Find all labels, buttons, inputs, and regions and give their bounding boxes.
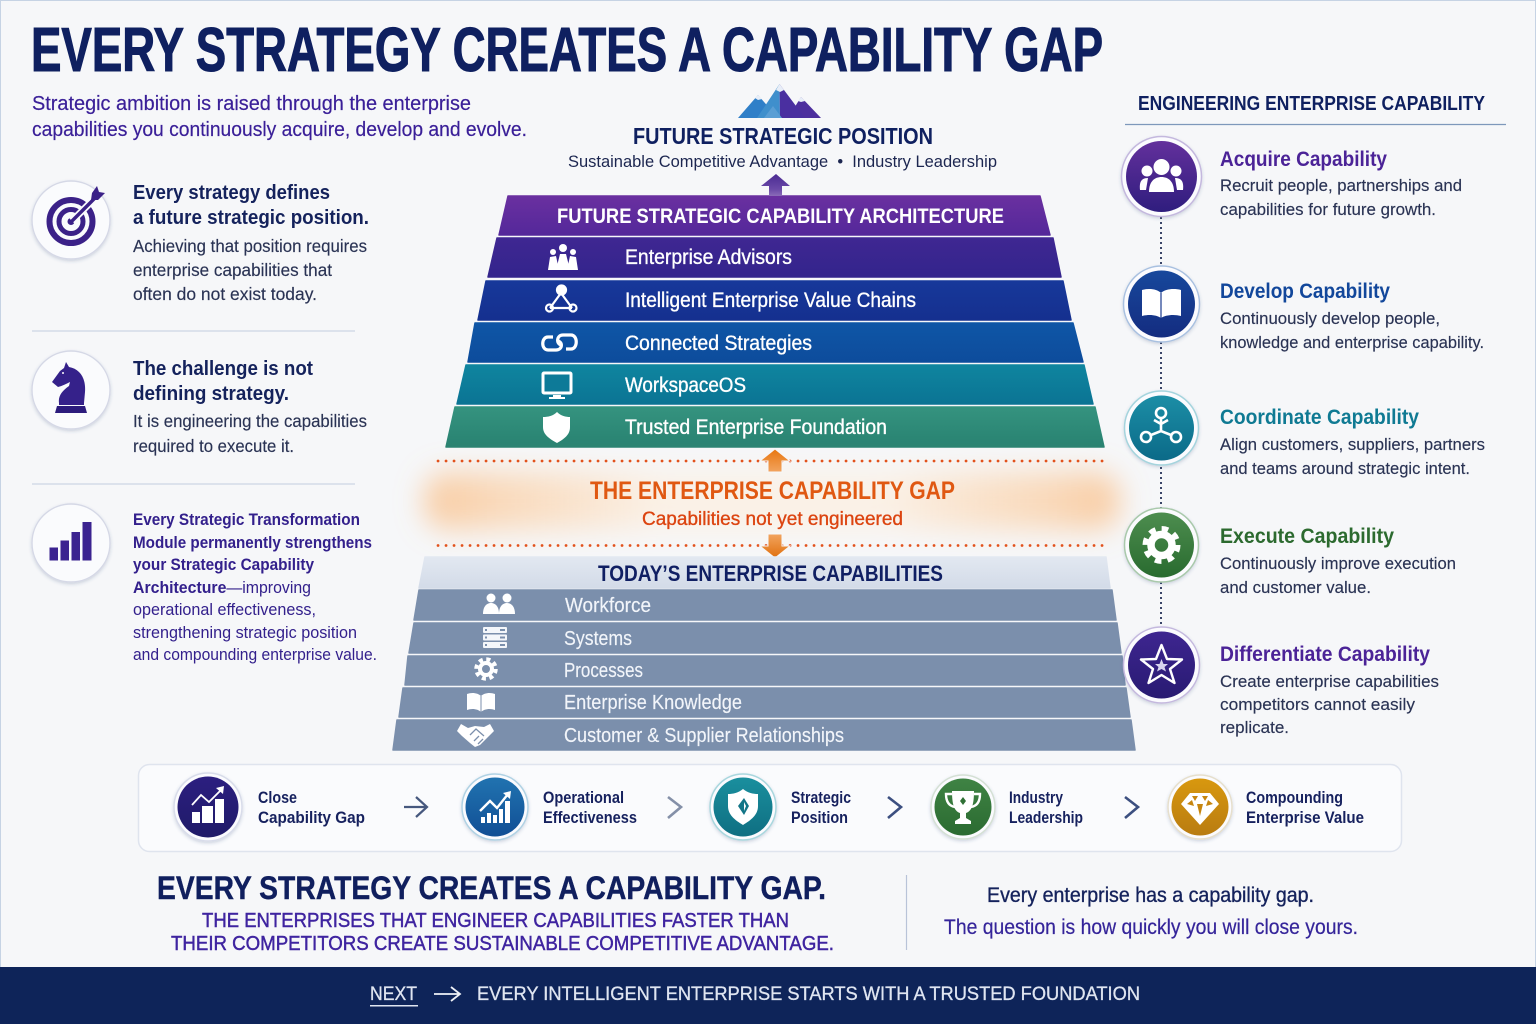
panel: future capability pyramid (446, 196, 1104, 447)
heading: the challenge (133, 357, 313, 405)
body: every strategy (133, 236, 367, 304)
layer: enterprise knowledge: Enterprise Knowledge (564, 692, 742, 714)
step text: differentiate (1220, 672, 1439, 737)
icon: handshake (457, 724, 494, 747)
step text: differentiate: Create enterprise capabilities (1220, 672, 1439, 691)
icon: rising bars (174, 773, 242, 841)
step text: coordinate (1220, 435, 1485, 478)
closing question: The question is how quickly you will close yours. (944, 916, 1358, 939)
body: transformation modules: strengthening strategic position (133, 624, 357, 642)
subtitle: Strategic ambition is raised through the enterprise (32, 93, 471, 115)
body: the challenge: It is engineering the capabilities (133, 411, 367, 431)
step text: develop: Continuously develop people, (1220, 309, 1440, 328)
arrow: step four (1125, 797, 1138, 818)
heading: every strategy (133, 181, 369, 229)
insight: transformation modules (32, 504, 377, 664)
layer: value chains: Intelligent Enterprise Value Chains (625, 289, 916, 312)
arrow: gap up (760, 449, 790, 472)
panel: value progression strip (138, 764, 1402, 852)
step text: execute: Continuously improve execution (1220, 554, 1456, 573)
icon: shield badge (710, 774, 776, 840)
body: transformation modules: Module permanently strengthens (133, 534, 372, 552)
icon: server stack (483, 627, 507, 648)
step text: develop: knowledge and enterprise capability. (1220, 333, 1484, 352)
arrow: next (434, 987, 460, 1001)
icon: mountains (738, 84, 821, 118)
icon: connected nodes (1124, 391, 1198, 465)
conclusion heading: EVERY STRATEGY CREATES A CAPABILITY GAP. (157, 870, 826, 906)
label: operational effectiveness: Operational (543, 788, 624, 807)
step text: differentiate: competitors cannot easily (1220, 695, 1415, 714)
next label: NEXT (370, 984, 417, 1005)
icon: open book (1124, 266, 1200, 342)
step title: develop: Develop Capability (1220, 280, 1390, 303)
step text: acquire: Recruit people, partnerships and (1220, 176, 1462, 195)
icon: diamond (1168, 775, 1232, 839)
icon: shield (543, 412, 570, 443)
step text: coordinate: Align customers, suppliers, partners (1220, 435, 1485, 454)
layer: processes: Processes (564, 660, 643, 682)
heading: every strategy: Every strategy defines (133, 181, 330, 204)
layer: connected strategies (468, 323, 1083, 362)
step: strategic position (710, 774, 851, 840)
footer bar (0, 967, 1536, 1024)
label: operational effectiveness (543, 788, 637, 827)
icon: target (32, 181, 110, 259)
icon: trophy (931, 775, 995, 839)
arrow: up to future position (761, 174, 790, 196)
arrow: step two (668, 797, 681, 818)
icon: chess knight (32, 351, 110, 429)
gap heading: THE ENTERPRISE CAPABILITY GAP (590, 477, 955, 505)
label: compounding enterprise value: Compounding (1246, 788, 1343, 807)
panel: today's capabilities pyramid (393, 557, 1135, 750)
layer: enterprise advisors: Enterprise Advisors (625, 246, 792, 269)
body: every strategy: enterprise capabilities that (133, 260, 332, 280)
body: the challenge (133, 411, 367, 456)
label: strategic position: Strategic (791, 788, 851, 807)
gap subheading: Capabilities not yet engineered (642, 508, 903, 530)
body: transformation modules: operational effectiveness, (133, 601, 316, 619)
icon: monitor (543, 373, 571, 399)
conclusion statement: THE ENTERPRISES THAT ENGINEER CAPABILITIES FASTER THAN (202, 910, 789, 932)
label: industry leadership (1009, 788, 1083, 827)
step: industry leadership (931, 775, 1083, 839)
label: operational effectiveness: Effectiveness (543, 808, 637, 827)
layer: value chains (478, 281, 1071, 320)
layer: trusted foundation: Trusted Enterprise Foundation (625, 416, 887, 439)
layer: architecture header (499, 196, 1050, 235)
layer: customer and supplier (393, 720, 1135, 750)
step text: acquire (1220, 176, 1462, 219)
label: strategic position (791, 788, 851, 827)
step: acquire (1122, 136, 1462, 219)
layer: customer and supplier: Customer & Supplier Relationships (564, 725, 844, 747)
step: compounding enterprise value (1168, 775, 1364, 839)
label: compounding enterprise value: Enterprise Value (1246, 808, 1364, 827)
heading: future strategic position: FUTURE STRATEGIC POSITION (633, 123, 933, 149)
layer: workspaceos: WorkspaceOS (625, 374, 746, 397)
icon: open book (467, 693, 495, 712)
icon: gear (1124, 508, 1198, 582)
icon: star (1124, 627, 1200, 703)
step title: execute: Execute Capability (1220, 525, 1394, 548)
step title: acquire: Acquire Capability (1220, 148, 1387, 171)
next topic: EVERY INTELLIGENT ENTERPRISE STARTS WITH A TRUSTED FOUNDATION (477, 984, 1140, 1005)
layer: workforce (414, 590, 1116, 620)
panel: the enterprise capability gap (424, 449, 1120, 558)
heading: the challenge: defining strategy. (133, 382, 289, 405)
layer: today's header: TODAY’S ENTERPRISE CAPABILITIES (598, 561, 943, 586)
icon: chain link (543, 335, 576, 350)
panel: left column insights (32, 181, 377, 664)
body: transformation modules: and compounding enterprise value. (133, 646, 377, 664)
layer: workforce: Workforce (565, 595, 651, 617)
step: differentiate (1124, 627, 1439, 737)
label: close capability gap (258, 788, 365, 827)
step text: execute (1220, 554, 1456, 597)
step text: develop (1220, 309, 1484, 352)
panel: engineering enterprise capability (1122, 93, 1506, 737)
subtitle (32, 93, 527, 141)
icon: gear (476, 660, 496, 678)
body: every strategy: often do not exist today. (133, 284, 317, 304)
body: the challenge: required to execute it. (133, 436, 294, 456)
step: execute (1124, 508, 1456, 597)
arrow: step three (888, 797, 901, 818)
body: transformation modules: Architecture—improving (133, 579, 311, 597)
arrow: step one (404, 797, 427, 817)
closing question (944, 884, 1358, 939)
insight: the challenge (32, 351, 367, 456)
insight: future strategic position (32, 181, 369, 304)
layer: systems: Systems (564, 628, 632, 650)
step text: execute: and customer value. (1220, 578, 1371, 597)
layer: trusted foundation (446, 407, 1104, 447)
layer: architecture header: FUTURE STRATEGIC CAPABILITY ARCHITECTURE (557, 205, 1004, 228)
heading: engineering capability: ENGINEERING ENTERPRISE CAPABILITY (1138, 93, 1486, 115)
label: close capability gap: Capability Gap (258, 808, 365, 827)
subheading: competitive advantage: Sustainable Competitive Advantage • Industry Leadership (568, 152, 997, 171)
icon: advisors (548, 244, 578, 270)
layer: enterprise knowledge (399, 688, 1130, 717)
body: transformation modules: your Strategic Capability (133, 556, 315, 574)
heading: the challenge: The challenge is not (133, 357, 313, 380)
step title: coordinate: Coordinate Capability (1220, 406, 1419, 429)
body: transformation modules (133, 511, 377, 664)
label: industry leadership: Industry (1009, 788, 1063, 807)
subtitle: capabilities you continuously acquire, develop and evolve. (32, 119, 527, 141)
step: close capability gap (174, 773, 365, 841)
icon: growth chart (462, 774, 528, 840)
body: transformation modules: Every Strategic Transformation (133, 511, 360, 529)
icon: workforce (483, 594, 515, 614)
layer: enterprise advisors (488, 238, 1061, 277)
conclusion statement (171, 910, 834, 955)
step text: coordinate: and teams around strategic intent. (1220, 459, 1470, 478)
closing question: Every enterprise has a capability gap. (987, 884, 1314, 907)
step: develop (1124, 266, 1484, 352)
layer: workspaceos (457, 365, 1093, 404)
step text: differentiate: replicate. (1220, 718, 1289, 737)
gap glow band (424, 472, 1120, 530)
step text: acquire: capabilities for future growth. (1220, 200, 1436, 219)
layer: connected strategies: Connected Strategies (625, 332, 812, 355)
layer: today's header (419, 557, 1110, 588)
body: every strategy: Achieving that position requires (133, 236, 367, 256)
step: coordinate (1124, 391, 1485, 478)
layer: processes (405, 656, 1125, 685)
icon: network (546, 286, 576, 312)
icon: bar chart (32, 504, 110, 582)
label: industry leadership: Leadership (1009, 808, 1083, 827)
layer: systems (409, 623, 1121, 653)
label: strategic position: Position (791, 808, 848, 827)
title: EVERY STRATEGY CREATES A CAPABILITY GAP (31, 16, 1103, 85)
step: operational effectiveness (462, 774, 637, 840)
icon: team (1122, 136, 1202, 216)
arrow: gap down (760, 534, 790, 558)
step title: differentiate: Differentiate Capability (1220, 643, 1430, 666)
conclusion statement: THEIR COMPETITORS CREATE SUSTAINABLE COMPETITIVE ADVANTAGE. (171, 933, 834, 955)
label: compounding enterprise value (1246, 788, 1364, 827)
label: close capability gap: Close (258, 788, 297, 807)
heading: every strategy: a future strategic position. (133, 206, 369, 229)
